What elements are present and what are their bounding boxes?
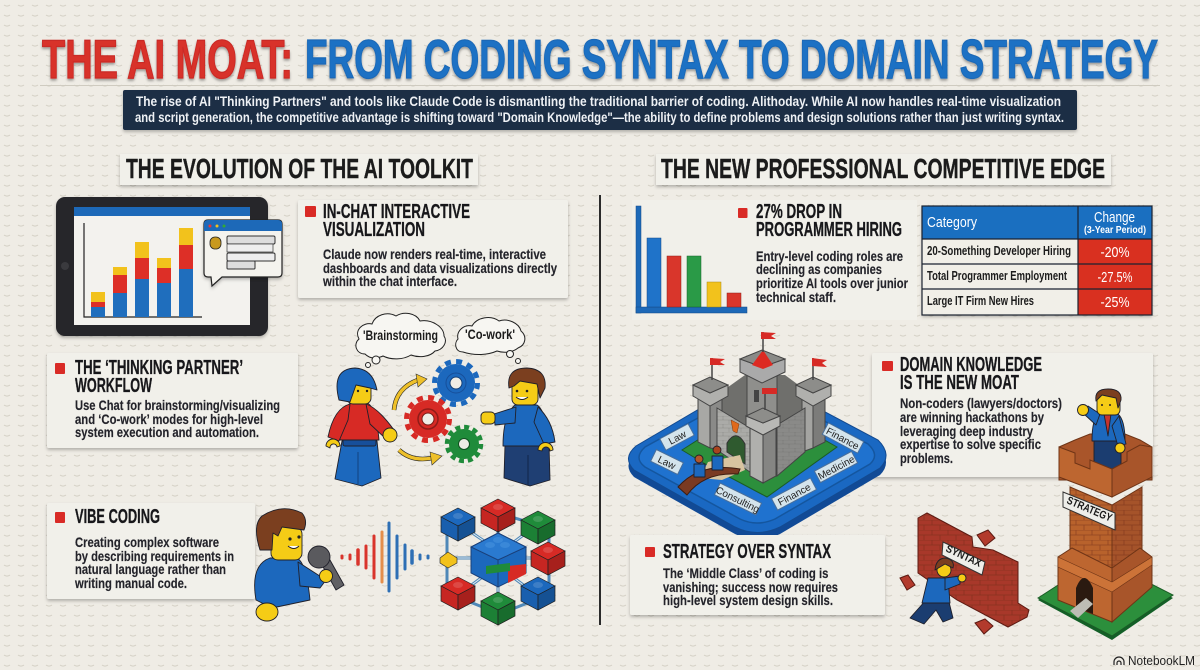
panel: in-chat interactive visualization: Claude now renders real-time, interactive	[323, 246, 546, 262]
table: hiring change: Change	[1094, 210, 1135, 226]
panel: 27% drop in programmer hiring: Entry-level coding roles are	[756, 248, 903, 264]
left tower	[693, 358, 728, 450]
microphone	[308, 546, 344, 590]
gear: green	[447, 427, 481, 461]
syntax brick wall with figure	[900, 513, 1029, 634]
thought bubble: brainstorming	[356, 313, 445, 368]
bullet	[645, 547, 655, 557]
green base	[1038, 560, 1173, 640]
moat label: Law: Law	[667, 429, 689, 447]
bullet	[55, 363, 65, 374]
panel: domain knowledge: leveraging deep industry	[900, 423, 1033, 439]
table: hiring change: -25%	[1100, 294, 1130, 311]
green island	[682, 402, 837, 497]
right tower	[796, 358, 831, 452]
heading: left column: THE EVOLUTION OF THE AI TOOLKIT	[126, 153, 473, 184]
strategy sign: STRATEGY	[1065, 495, 1114, 525]
front tower	[746, 388, 780, 483]
bullet	[882, 361, 893, 371]
figure on tower	[1078, 389, 1126, 472]
panel: domain knowledge: Non-coders (lawyers/doctors)	[900, 395, 1062, 411]
minifigure: blue torso brown hair	[481, 368, 555, 486]
panel: strategy over syntax: The ‘Middle Class’ of coding is	[663, 565, 829, 581]
panel: strategy over syntax: vanishing; success now requires	[663, 579, 838, 595]
bullet	[305, 206, 316, 217]
intro banner	[123, 90, 1077, 130]
strategy tower with figure	[1038, 389, 1173, 640]
panel: in-chat interactive visualization: dashboards and data visualizations directly	[323, 260, 557, 276]
panel: 27% drop in programmer hiring: declining as companies	[756, 261, 882, 277]
thought bubble: co-work: 'Co-work'	[465, 327, 515, 342]
minifigure with microphone	[255, 509, 344, 621]
panel: 27% drop in programmer hiring: prioritize AI tools over junior	[756, 275, 908, 291]
bar chart: programmer hiring	[632, 200, 917, 320]
castle inner	[717, 375, 812, 460]
moat label: Finance	[772, 478, 817, 511]
table: hiring change: 20-Something Developer Hiring	[927, 244, 1071, 258]
panel: domain knowledge: problems.	[900, 450, 953, 466]
panel: domain knowledge: are winning hackathons by	[900, 409, 1044, 425]
loose brick	[977, 530, 995, 546]
moat label: Law	[660, 424, 694, 451]
thought bubble: brainstorming: 'Brainstorming	[363, 328, 438, 343]
moat base	[628, 392, 886, 540]
arrow: bottom curved	[399, 450, 442, 465]
bullet	[55, 512, 65, 523]
bridge figures	[694, 446, 723, 477]
panel: vibe coding: VIBE CODING	[75, 506, 160, 528]
table: hiring change: Total Programmer Employment	[927, 269, 1068, 283]
chat popup	[204, 220, 282, 286]
panel: thinking partner workflow: system execution and automation.	[75, 424, 259, 440]
panel: strategy over syntax: STRATEGY OVER SYNTAX	[663, 541, 831, 563]
panel: domain knowledge: DOMAIN KNOWLEDGE	[900, 354, 1042, 376]
moat label: Finance: Finance	[776, 482, 813, 509]
panel: 27% drop in programmer hiring: 27% DROP IN	[756, 201, 842, 223]
sound waveform	[342, 523, 428, 591]
table: hiring change: Category	[927, 214, 977, 231]
table: hiring change	[922, 206, 1152, 315]
panel: strategy over syntax: high-level system design skills.	[663, 592, 833, 608]
heading: left column	[120, 153, 478, 185]
panel: 27% drop in programmer hiring	[738, 201, 908, 305]
moat label: Consulting: Consulting	[714, 485, 761, 516]
moat label: Law	[650, 450, 683, 475]
doorway	[1076, 578, 1093, 614]
panel: domain knowledge: expertise to solve specific	[900, 436, 1041, 452]
bullet	[738, 208, 748, 218]
panel: thinking partner workflow	[47, 353, 298, 448]
front walls with gate	[717, 408, 750, 472]
panel: domain knowledge	[872, 353, 1153, 477]
moat label: Law: Law	[656, 454, 678, 473]
moat label: Medicine: Medicine	[816, 454, 857, 483]
panel: vibe coding: natural language rather than	[75, 561, 226, 577]
tower lower section	[1058, 548, 1112, 622]
syntax sign: SYNTAX	[944, 543, 983, 570]
tower shaft	[1070, 487, 1112, 578]
panel: thinking partner workflow: Use Chat for brainstorming/visualizing	[75, 397, 280, 413]
intro banner: The rise of AI "Thinking Partners" and tools like Claude Code is dismantling the traditional barrier of coding. Alithoday. While AI now handles real-time visualization	[136, 94, 1061, 109]
crown front	[1059, 447, 1112, 497]
panel: 27% drop in programmer hiring: technical staff.	[756, 289, 836, 305]
panel: vibe coding: writing manual code.	[74, 575, 187, 591]
panel: in-chat interactive visualization	[298, 200, 568, 298]
panel: vibe coding	[47, 503, 255, 599]
gear: blue	[434, 362, 478, 404]
thought bubble: co-work	[456, 318, 525, 364]
loose brick	[975, 619, 993, 634]
minifigure pushing wall	[910, 558, 966, 624]
panel: domain knowledge: IS THE NEW MOAT	[900, 372, 1019, 394]
table: hiring change: -20%	[1100, 244, 1130, 261]
table: hiring change: (3-Year Period)	[1084, 225, 1146, 236]
loose brick	[900, 575, 915, 590]
moat label: Finance: Finance	[824, 426, 861, 453]
footer: NotebookLM mark: NotebookLM	[1128, 653, 1195, 668]
sand path	[700, 455, 745, 480]
table: hiring change: -27.5%	[1098, 269, 1132, 286]
panel: thinking partner workflow: THE ‘THINKING PARTNER’	[75, 357, 243, 379]
title: THE AI MOAT:	[42, 28, 293, 90]
panel: in-chat interactive visualization: VISUALIZATION	[323, 219, 425, 241]
panel: 27% drop in programmer hiring: PROGRAMMER HIRING	[756, 219, 902, 241]
gear: red	[406, 398, 450, 440]
panel: thinking partner workflow: and ‘Co-work’ modes for high-level	[75, 411, 263, 427]
crown back	[1059, 434, 1152, 480]
minifigure: red torso with blue helmet	[326, 368, 397, 486]
brick network cube	[440, 499, 565, 625]
gears	[406, 362, 481, 461]
table: hiring change: Large IT Firm New Hires	[927, 294, 1034, 308]
bridge	[678, 467, 740, 495]
panel: thinking partner workflow: WORKFLOW	[75, 375, 152, 397]
panel: in-chat interactive visualization: IN-CHAT INTERACTIVE	[323, 201, 470, 223]
panel: vibe coding: by describing requirements in	[75, 548, 234, 564]
tablet with stacked bar chart	[56, 197, 282, 336]
back tower	[740, 332, 785, 422]
panel: strategy over syntax	[630, 535, 885, 615]
panel: vibe coding: Creating complex software	[75, 534, 219, 550]
arrow: top curved	[394, 374, 427, 410]
castle on moat	[628, 332, 886, 540]
panel: in-chat interactive visualization: within the chat interface.	[322, 273, 457, 289]
